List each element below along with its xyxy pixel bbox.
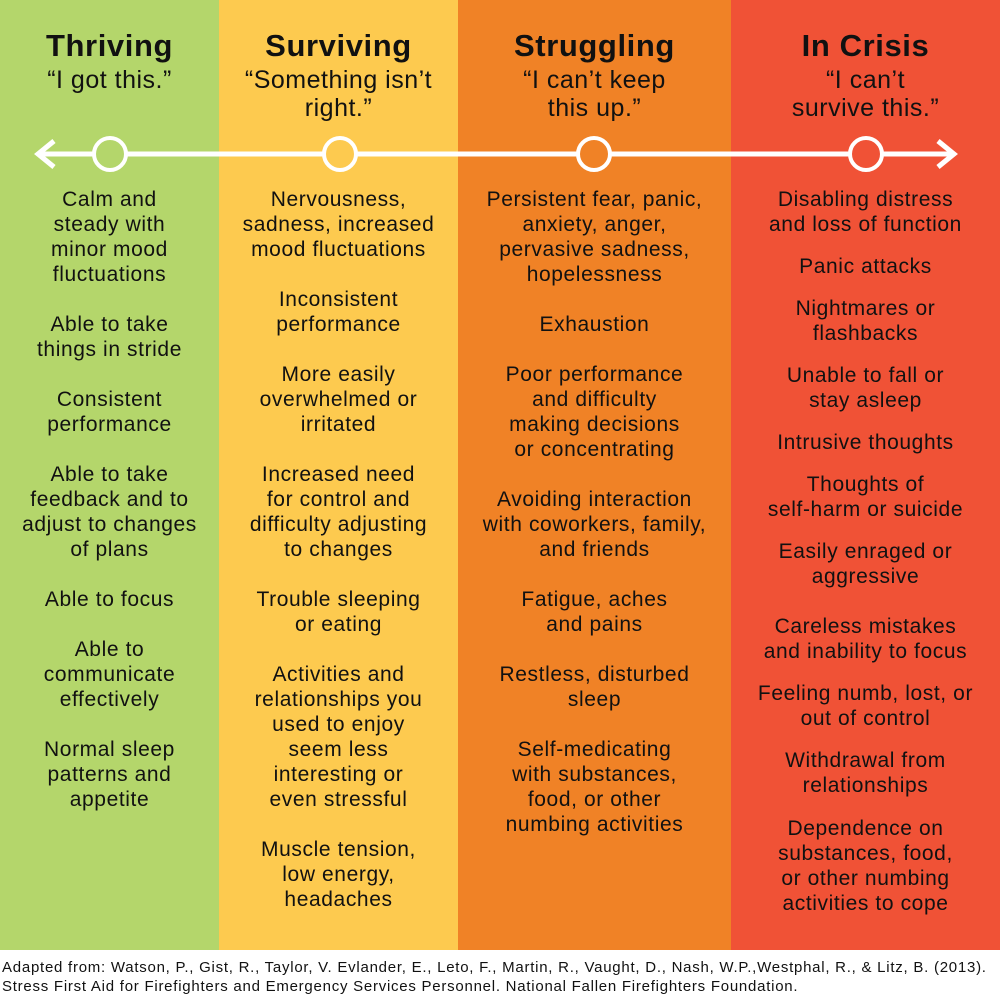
footer: citation xyxy=(2,959,987,995)
text: fear xyxy=(487,188,702,286)
text: intrusive: Intrusive thoughts xyxy=(777,431,954,454)
text: control: difficulty adjusting xyxy=(250,513,427,536)
quote: surviving xyxy=(245,66,432,122)
quote: in crisis: “I can’t xyxy=(826,66,905,94)
text: disabling xyxy=(769,188,962,236)
text: self-medicating: Self-medicating xyxy=(518,738,671,761)
text: fatigue xyxy=(521,588,668,636)
text: self-medicating: food, or other xyxy=(528,788,661,811)
text: activities: seem less xyxy=(289,738,388,761)
panel: in crisis xyxy=(731,0,1000,950)
text: dependence: activities to cope xyxy=(782,892,949,915)
text: self-medicating: numbing activities xyxy=(506,813,683,836)
heading: struggling: Struggling xyxy=(514,28,675,63)
text: panic: Panic attacks xyxy=(799,255,932,278)
text: nightmares xyxy=(796,297,935,345)
text: disabling: and loss of function xyxy=(769,213,962,236)
text: nightmares: flashbacks xyxy=(813,322,918,345)
text: sleep: patterns and xyxy=(48,763,171,786)
text: disabling: Disabling distress xyxy=(778,188,953,211)
text: fear: pervasive sadness, xyxy=(499,238,690,261)
text: restless: sleep xyxy=(568,688,621,711)
arrow: continuum xyxy=(34,136,958,172)
text: numb xyxy=(758,682,973,730)
text: withdrawal xyxy=(785,749,946,797)
text: muscle: headaches xyxy=(284,888,393,911)
text: control: to changes xyxy=(284,538,393,561)
text: overwhelmed xyxy=(260,363,417,436)
text: avoiding: Avoiding interaction xyxy=(497,488,692,511)
text: sleep: Normal sleep xyxy=(44,738,175,761)
text: dependence: or other numbing xyxy=(781,867,950,890)
text: overwhelmed: More easily xyxy=(282,363,395,386)
text: withdrawal: relationships xyxy=(803,774,928,797)
text: poor performance: making decisions xyxy=(509,413,680,436)
text: feedback: adjust to changes xyxy=(22,513,197,536)
text: activities: Activities and xyxy=(272,663,405,686)
quote: thriving: “I got this.” xyxy=(47,66,172,94)
text: muscle: Muscle tension, xyxy=(261,838,416,861)
text: careless xyxy=(764,615,967,663)
text: muscle xyxy=(261,838,416,911)
text: activities: interesting or xyxy=(274,763,403,786)
text: nervousness xyxy=(243,188,434,261)
text: trouble sleeping: Trouble sleeping xyxy=(256,588,421,611)
text: control xyxy=(250,463,427,561)
text: dependence xyxy=(778,817,953,915)
text: avoiding xyxy=(482,488,706,561)
text: self-harm: Thoughts of xyxy=(807,473,924,496)
text: restless: Restless, disturbed xyxy=(500,663,689,686)
text: calm: steady with xyxy=(54,213,165,236)
text: avoiding: with coworkers, family, xyxy=(483,513,706,536)
text: restless xyxy=(500,663,689,711)
text: dependence: Dependence on xyxy=(787,817,944,840)
text: poor performance: and difficulty xyxy=(532,388,657,411)
text: communicate xyxy=(44,638,175,711)
text: avoiding: and friends xyxy=(539,538,650,561)
quote: struggling xyxy=(523,66,666,122)
text: stride: Able to take xyxy=(50,313,169,336)
text: nervousness: Nervousness, xyxy=(271,188,406,211)
text: numb: Feeling numb, lost, or xyxy=(758,682,973,705)
text: stride: things in stride xyxy=(37,338,182,361)
text: feedback: of plans xyxy=(70,538,149,561)
quote: surviving: “Something isn’t xyxy=(245,66,432,94)
text: enraged xyxy=(779,540,952,588)
text: communicate: communicate xyxy=(44,663,175,686)
quote: struggling: this up.” xyxy=(548,94,641,122)
text: activities xyxy=(255,663,422,811)
text: nervousness: sadness, increased xyxy=(243,213,434,236)
text: activities: even stressful xyxy=(270,788,407,811)
text: dependence: substances, food, xyxy=(778,842,953,865)
text: poor performance: or concentrating xyxy=(514,438,675,461)
text: feedback: feedback and to xyxy=(30,488,189,511)
text: focus: Able to focus xyxy=(45,588,174,611)
text: calm: fluctuations xyxy=(53,263,166,286)
quote: in crisis xyxy=(792,66,939,122)
text: self-harm xyxy=(768,473,963,521)
quote: surviving: right.” xyxy=(305,94,372,122)
text: muscle: low energy, xyxy=(282,863,395,886)
text: fatigue: and pains xyxy=(546,613,643,636)
text: activities: relationships you xyxy=(255,688,422,711)
text: self-medicating: with substances, xyxy=(512,763,677,786)
text: activities: used to enjoy xyxy=(272,713,405,736)
text: careless: and inability to focus xyxy=(764,640,967,663)
text: poor performance xyxy=(506,363,683,461)
text: fear: anxiety, anger, xyxy=(522,213,667,236)
text: consistent: performance xyxy=(47,413,172,436)
text: control: for control and xyxy=(267,488,410,511)
heading: in crisis: In Crisis xyxy=(802,28,929,63)
text: feedback xyxy=(22,463,197,561)
text: inconsistent: performance xyxy=(276,313,401,336)
footer: citation: Stress First Aid for Firefighters and Emergency Services Personnel. National Fallen Firefighters Foundation. xyxy=(2,978,798,995)
quote: struggling: “I can’t keep xyxy=(523,66,666,94)
text: enraged: Easily enraged or xyxy=(779,540,952,563)
text: unable to sleep xyxy=(787,364,944,412)
text: withdrawal: Withdrawal from xyxy=(785,749,946,772)
panel: struggling xyxy=(458,0,731,950)
text: unable to sleep: Unable to fall or xyxy=(787,364,944,387)
text: self-medicating xyxy=(506,738,683,836)
text: calm: Calm and xyxy=(62,188,157,211)
panel: surviving xyxy=(219,0,458,950)
text: overwhelmed: irritated xyxy=(301,413,376,436)
quote: in crisis: survive this.” xyxy=(792,94,939,122)
text: trouble sleeping xyxy=(256,588,421,636)
text: feedback: Able to take xyxy=(50,463,169,486)
text: numb: out of control xyxy=(801,707,930,730)
text: sleep: appetite xyxy=(70,788,149,811)
text: careless: Careless mistakes xyxy=(775,615,956,638)
text: trouble sleeping: or eating xyxy=(295,613,382,636)
text: unable to sleep: stay asleep xyxy=(809,389,922,412)
text: fear: hopelessness xyxy=(527,263,662,286)
heading: surviving: Surviving xyxy=(265,28,412,63)
text: inconsistent xyxy=(276,288,401,336)
text: calm: minor mood xyxy=(51,238,168,261)
text: enraged: aggressive xyxy=(812,565,919,588)
text: overwhelmed: overwhelmed or xyxy=(260,388,417,411)
text: inconsistent: Inconsistent xyxy=(279,288,398,311)
text: fatigue: Fatigue, aches xyxy=(521,588,668,611)
text: sleep xyxy=(44,738,175,811)
heading: thriving: Thriving xyxy=(46,28,173,63)
footer: citation: Adapted from: Watson, P., Gist, R., Taylor, V. Evlander, E., Leto, F., Martin, R., Vaught, D., Nash, W.P.,Westphal, R., & Litz, B. (2013). xyxy=(2,959,987,976)
text: stride xyxy=(37,313,182,361)
text: calm xyxy=(51,188,168,286)
text: exhaustion: Exhaustion xyxy=(540,313,649,336)
text: nightmares: Nightmares or xyxy=(796,297,935,320)
text: poor performance: Poor performance xyxy=(506,363,683,386)
text: fear: Persistent fear, panic, xyxy=(487,188,702,211)
text: consistent: Consistent xyxy=(57,388,162,411)
text: consistent xyxy=(47,388,172,436)
text: communicate: Able to xyxy=(75,638,144,661)
text: control: Increased need xyxy=(262,463,415,486)
text: communicate: effectively xyxy=(60,688,159,711)
text: nervousness: mood fluctuations xyxy=(251,238,426,261)
text: self-harm: self-harm or suicide xyxy=(768,498,963,521)
panel: thriving xyxy=(0,0,219,950)
